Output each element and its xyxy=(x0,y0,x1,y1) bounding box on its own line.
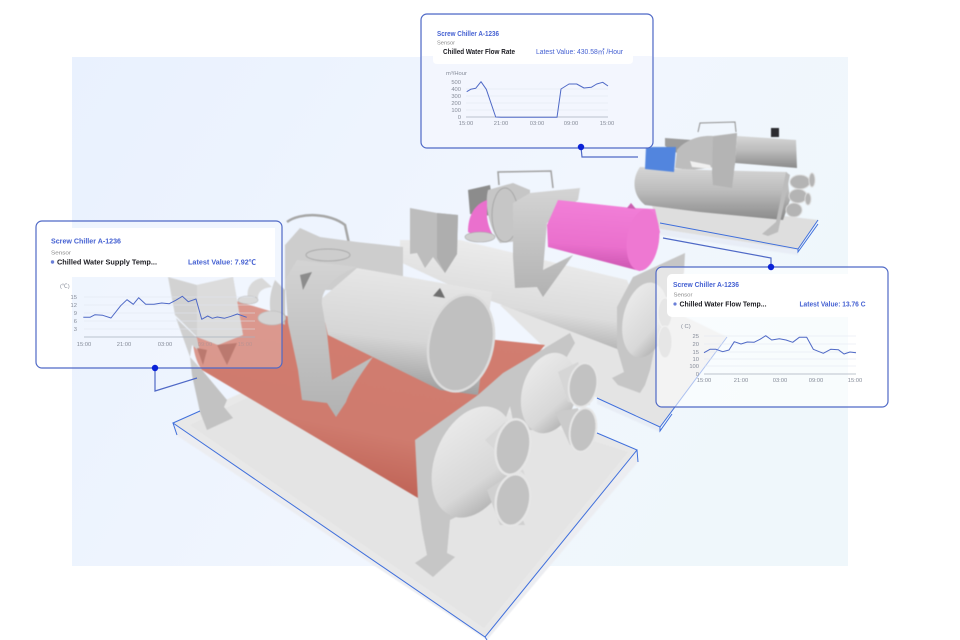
line chart: flow rate: 200 xyxy=(451,101,461,107)
line chart: flow rate: 09:00 xyxy=(564,121,578,127)
middle chiller front head and nozzles xyxy=(612,253,685,393)
line chart: flow rate: m³/Hour xyxy=(446,71,467,77)
panel: left sensor card xyxy=(36,221,282,368)
equipment: chillers xyxy=(168,122,818,640)
status dot xyxy=(51,260,54,264)
line chart: flow rate: 15:00 xyxy=(459,121,473,127)
panel: top sensor card xyxy=(421,14,653,148)
connector node: left card xyxy=(152,365,158,371)
sensor label: Sensor xyxy=(437,40,455,46)
line chart: flow temperature: 0 xyxy=(696,372,699,378)
middle chiller rear box xyxy=(410,208,458,273)
status dot xyxy=(673,302,677,306)
line chart: supply temperature: 15:00 xyxy=(238,342,252,348)
latest value: Latest Value: 430.58㎡ /Hour xyxy=(536,48,624,56)
card title: Screw Chiller A-1236 xyxy=(51,238,121,246)
base plate outlines xyxy=(173,220,818,640)
sensor name: Chilled Water Supply Temp... xyxy=(57,260,157,266)
rear chiller upper cylinder xyxy=(735,136,797,168)
main chiller front head, plate and leg xyxy=(415,373,535,577)
latest value: Latest Value: 7.92℃ xyxy=(188,258,256,266)
rear chiller nozzles xyxy=(786,173,815,217)
line chart: flow temperature: 15:00 xyxy=(697,378,711,384)
line chart: flow temperature: 15:00 xyxy=(848,378,862,384)
pink cylinder xyxy=(547,200,663,273)
rear chiller compressor xyxy=(665,122,779,170)
main chiller rear head and nozzles xyxy=(503,333,601,454)
line chart: supply temperature: (℃) xyxy=(60,283,70,290)
line chart: flow temperature xyxy=(681,324,862,384)
connector: left card xyxy=(155,368,197,391)
sensor name: Chilled Water Flow Temp... xyxy=(680,302,767,308)
line chart: flow rate: 15:00 xyxy=(600,121,614,127)
line chart: supply temperature: 15 xyxy=(71,295,77,301)
main chiller rear saddle and pipes xyxy=(285,215,403,290)
line chart: flow temperature: 25 xyxy=(693,334,699,340)
middle chiller base xyxy=(500,300,727,432)
line chart: flow temperature: 15 xyxy=(693,350,699,356)
line chart: flow temperature: 21:00 xyxy=(734,378,748,384)
latest value: Latest Value: 13.76 C xyxy=(800,302,866,308)
main chiller flanges xyxy=(238,278,286,325)
line chart: supply temperature: 3 xyxy=(74,327,77,333)
line chart: supply temperature: 21:00 xyxy=(117,342,131,348)
line chart: supply temperature: 15:00 xyxy=(77,342,91,348)
line chart: flow rate: 400 xyxy=(451,87,461,93)
panel: right sensor card xyxy=(656,267,888,407)
line chart: flow rate xyxy=(446,71,614,127)
line chart: flow rate: 0 xyxy=(458,115,461,121)
connector: top card xyxy=(581,147,638,157)
background panel xyxy=(72,57,848,566)
sensor label: Sensor xyxy=(51,250,71,256)
middle chiller saddle xyxy=(513,188,580,297)
line chart: flow temperature: 20 xyxy=(693,342,699,348)
connector node: right card xyxy=(768,264,774,270)
sensor name: Chilled Water Flow Rate xyxy=(443,49,515,56)
sensor label: Sensor xyxy=(674,292,693,298)
line chart: supply temperature: 12 xyxy=(71,303,77,309)
main chiller red condenser xyxy=(193,300,545,498)
line chart: flow rate: 21:00 xyxy=(494,121,508,127)
line chart: supply temperature: 9 xyxy=(74,311,77,317)
line chart: flow rate: 500 xyxy=(451,80,461,86)
middle chiller dark compressor xyxy=(468,171,553,243)
line chart: flow rate: 300 xyxy=(451,94,461,100)
pink pipe xyxy=(468,200,493,238)
line chart: supply temperature xyxy=(60,283,255,348)
card title: Screw Chiller A-1236 xyxy=(673,282,739,289)
highlighted blue component xyxy=(645,147,676,172)
main chiller upper cylinder xyxy=(285,260,502,417)
main chiller base plate xyxy=(173,340,638,640)
line chart: flow temperature: 10 xyxy=(693,357,699,363)
line chart: flow rate: 100 xyxy=(451,108,461,114)
line chart: supply temperature: 09:00 xyxy=(198,342,212,348)
line chart: supply temperature: 03:00 xyxy=(158,342,172,348)
line chart: flow rate: 03:00 xyxy=(530,121,544,127)
card title: Screw Chiller A-1236 xyxy=(437,31,499,38)
line chart: supply temperature: 6 xyxy=(74,319,77,325)
connector: right card xyxy=(663,238,771,267)
connector node: top card xyxy=(578,144,584,150)
line chart: flow temperature: 03:00 xyxy=(773,378,787,384)
line chart: flow temperature: 09:00 xyxy=(809,378,823,384)
main chiller left saddle and leg xyxy=(168,277,243,430)
rear chiller base xyxy=(650,200,818,255)
line chart: flow temperature: ( C) xyxy=(681,324,691,330)
line chart: flow temperature: 100 xyxy=(689,364,699,370)
middle chiller lower cylinder xyxy=(400,240,640,352)
rear chiller lower cylinder xyxy=(635,133,790,236)
